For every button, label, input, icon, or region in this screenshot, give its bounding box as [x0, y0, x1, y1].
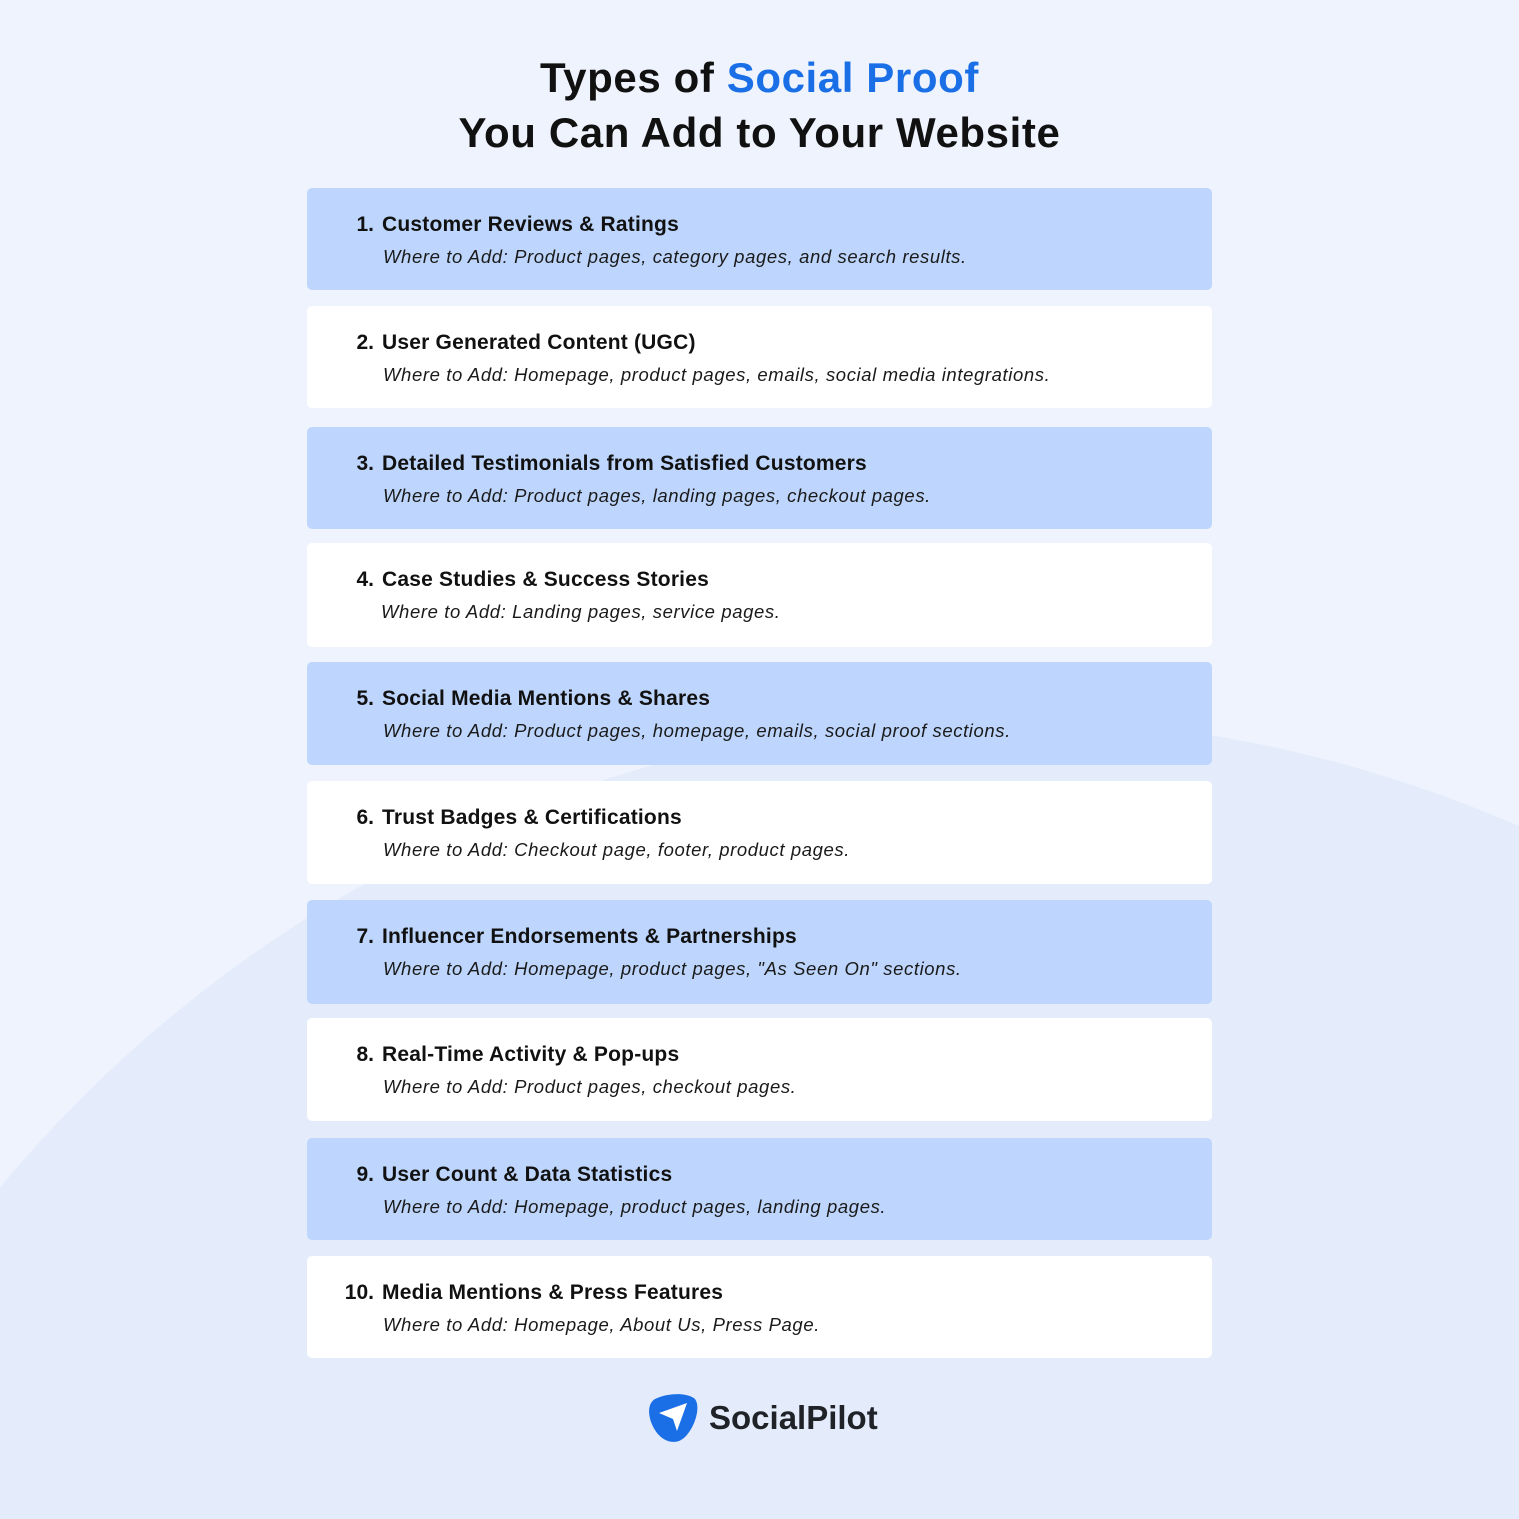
card 6: Where to Add: Checkout page, footer, product pages. [383, 839, 850, 860]
card 9: Where to Add: Homepage, product pages, landing pages. [383, 1196, 886, 1217]
card 3: Where to Add: Product pages, landing pages, checkout pages. [383, 485, 931, 506]
card 3: 3. [356, 452, 374, 475]
icon: paper plane [649, 1394, 698, 1442]
card 5 [307, 662, 1212, 765]
logo [649, 1394, 878, 1442]
card 3 [307, 427, 1212, 529]
card 6: 6. [356, 806, 374, 829]
card 1: Customer Reviews & Ratings [382, 213, 679, 236]
card 8: Real-Time Activity & Pop-ups [382, 1043, 679, 1066]
card 1: Where to Add: Product pages, category pages, and search results. [383, 246, 967, 267]
card 7: Where to Add: Homepage, product pages, "As Seen On" sections. [383, 958, 962, 979]
card 4: 4. [356, 568, 374, 591]
card 10: 10. [345, 1281, 374, 1304]
card 9: 9. [356, 1163, 374, 1186]
card 7: Influencer Endorsements & Partnerships [382, 925, 797, 948]
card 1 [307, 188, 1212, 290]
card 2: Where to Add: Homepage, product pages, emails, social media integrations. [383, 364, 1050, 385]
card 1: 1. [356, 213, 374, 236]
card 8 [307, 1018, 1212, 1121]
card 8: 8. [356, 1043, 374, 1066]
card 4: Where to Add: Landing pages, service pages. [381, 601, 780, 622]
title: Types of Social Proof [540, 54, 979, 101]
card 8: Where to Add: Product pages, checkout pages. [383, 1076, 796, 1097]
card 4: Case Studies & Success Stories [382, 568, 709, 591]
card 9 [307, 1138, 1212, 1240]
logo: SocialPilot [709, 1399, 878, 1436]
card 2: User Generated Content (UGC) [382, 331, 696, 354]
title [459, 54, 1060, 156]
card 7 [307, 900, 1212, 1004]
title: You Can Add to Your Website [459, 109, 1060, 156]
card 5: Social Media Mentions & Shares [382, 687, 710, 710]
card 10: Media Mentions & Press Features [382, 1281, 723, 1304]
card 6: Trust Badges & Certifications [382, 806, 682, 829]
card 5: 5. [356, 687, 374, 710]
card 6 [307, 781, 1212, 884]
card 9: User Count & Data Statistics [382, 1163, 672, 1186]
card 3: Detailed Testimonials from Satisfied Customers [382, 452, 867, 475]
card 7: 7. [356, 925, 374, 948]
card 4 [307, 543, 1212, 647]
card 2 [307, 306, 1212, 408]
card 10 [307, 1256, 1212, 1358]
card 2: 2. [356, 331, 374, 354]
card 5: Where to Add: Product pages, homepage, emails, social proof sections. [383, 720, 1011, 741]
card 10: Where to Add: Homepage, About Us, Press Page. [383, 1314, 820, 1335]
